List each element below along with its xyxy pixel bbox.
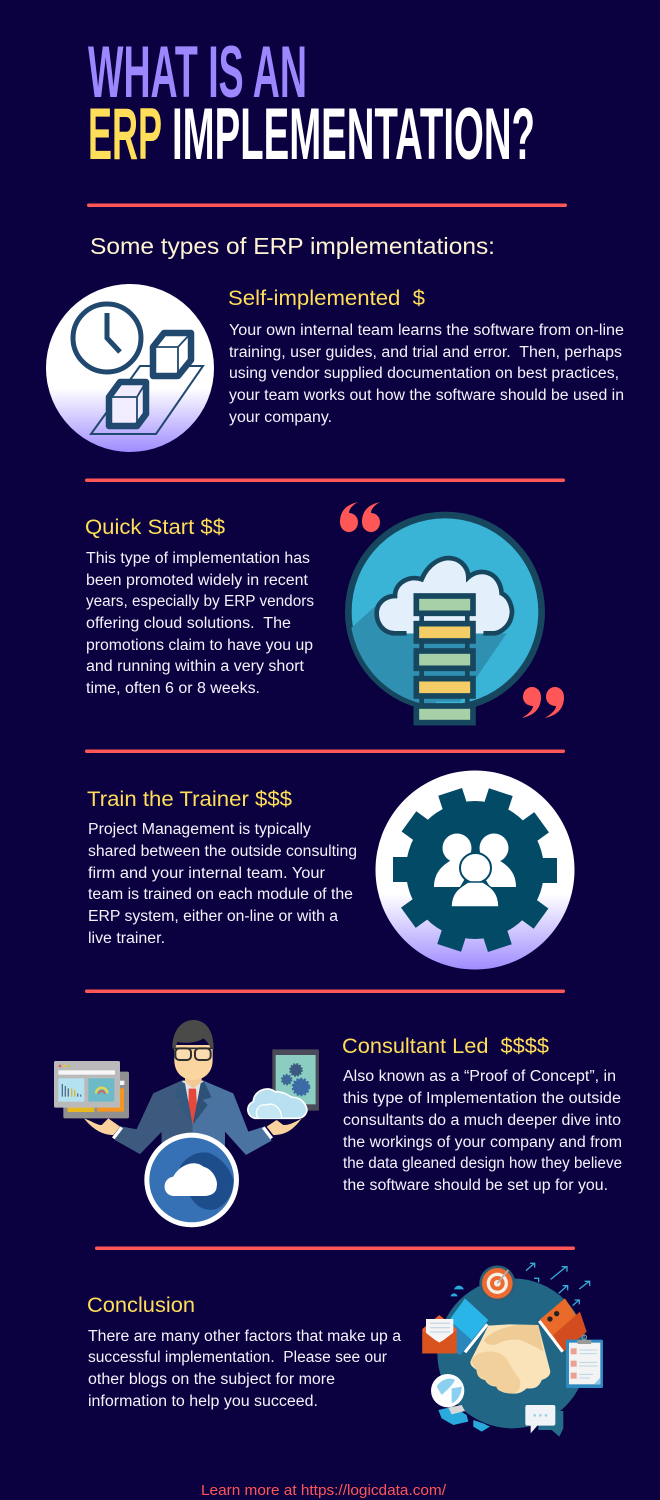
text: self-implemented description: Your own internal team learns the software from on-line	[229, 322, 624, 339]
text: train the trainer description: ERP system, either on-line or with a	[88, 908, 338, 925]
text: conclusion description: information to help you succeed.	[88, 1393, 318, 1410]
heading: consultant led: Consultant Led $$$$	[342, 1035, 549, 1058]
icon: clock and cubes	[46, 284, 214, 452]
text: quick start description: time, often 6 or 8 weeks.	[86, 680, 260, 697]
text: conclusion description: There are many other factors that make up a	[88, 1328, 401, 1345]
text: consultant led description: the data gleaned design how they believe	[343, 1155, 622, 1172]
text: consultant led description: the software should be set up for you.	[343, 1177, 608, 1194]
text: self-implemented description: using vendor supplied documentation on best practices,	[229, 365, 619, 382]
panel: train the trainer	[87, 770, 574, 970]
text: consultant led description: this type of Implementation the outside	[343, 1090, 621, 1107]
text: train the trainer description: Project Management is typically	[88, 821, 311, 838]
icon: gear with people	[376, 770, 574, 970]
subheading: Some types of ERP implementations:	[90, 233, 495, 259]
heading: self-implemented: Self-implemented $	[228, 287, 425, 310]
footer link: Learn more at https://logicdata.com/	[201, 1483, 447, 1499]
text: conclusion description	[88, 1328, 401, 1410]
text: conclusion description: successful implementation. Please see our	[88, 1349, 387, 1366]
text: train the trainer description	[88, 821, 357, 947]
text: conclusion description: other blogs on the subject for more	[88, 1371, 335, 1388]
heading: train the trainer: Train the Trainer $$$	[87, 788, 292, 811]
panel: self-implemented	[46, 284, 624, 452]
text: consultant led description: Also known as a “Proof of Concept”, in	[343, 1068, 616, 1085]
icon: cloud server	[343, 515, 542, 730]
icon: consultant with cloud and devices	[54, 1020, 319, 1227]
text: quick start description: and running within a very short	[86, 658, 305, 675]
title	[88, 32, 535, 175]
text: self-implemented description	[229, 322, 624, 426]
heading: quick start: Quick Start $$	[85, 516, 225, 539]
panel: quick start	[85, 502, 564, 730]
text: self-implemented description: your company.	[229, 409, 332, 426]
panel: consultant led	[54, 1020, 622, 1227]
text: train the trainer description: firm and your internal team. Your	[88, 865, 325, 882]
text: train the trainer description: live trainer.	[88, 930, 165, 947]
icon: closing quote	[522, 687, 564, 718]
title: WHAT IS AN	[88, 32, 307, 113]
text: quick start description: been promoted widely in recent	[86, 572, 309, 589]
text: self-implemented description: training, user guides, and trial and error. Then, perhaps	[229, 344, 622, 361]
text: train the trainer description: shared between the outside consulting	[88, 843, 357, 860]
text: consultant led description	[343, 1068, 622, 1194]
text: quick start description: years, especially by ERP vendors	[86, 593, 314, 610]
text: self-implemented description: your team works out how the software should be used in	[229, 387, 624, 404]
text: quick start description: offering cloud solutions. The	[86, 615, 291, 632]
panel: conclusion	[87, 1263, 603, 1437]
title: ERP	[88, 94, 162, 175]
icon: handshake	[422, 1263, 603, 1437]
text: quick start description: promotions claim to have you up	[86, 637, 313, 654]
text: train the trainer description: team is trained on each module of the	[88, 886, 353, 903]
text: consultant led description: the workings of your company and from	[343, 1134, 622, 1151]
text: quick start description: This type of implementation has	[86, 550, 310, 567]
icon: opening quote	[340, 502, 380, 532]
text: consultant led description: consultants do a much deeper dive into	[343, 1112, 621, 1129]
text: quick start description	[86, 550, 314, 697]
heading: conclusion: Conclusion	[87, 1294, 195, 1317]
